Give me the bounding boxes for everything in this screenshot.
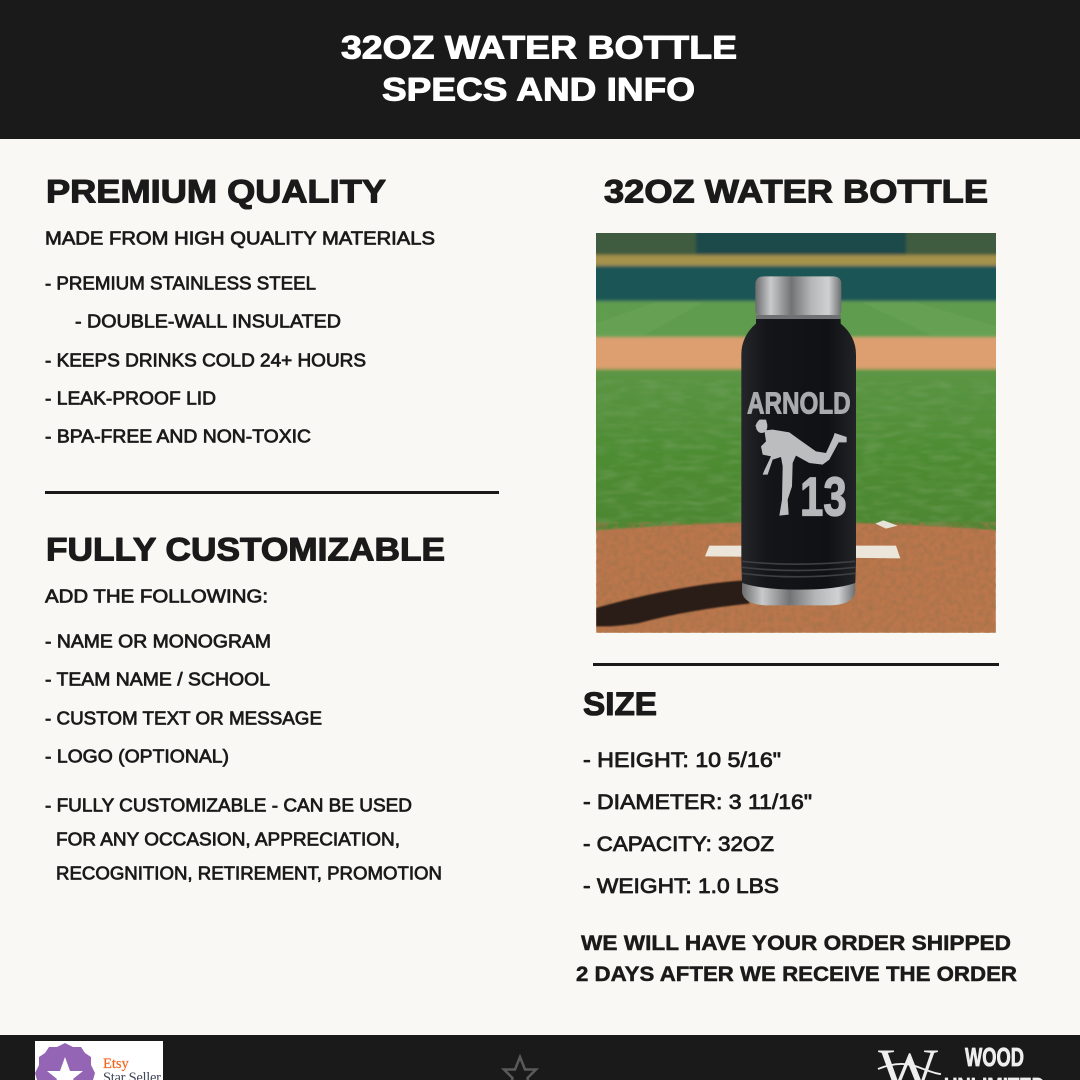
feature list: customization options: - NAME OR MONOGRAM: [45, 630, 271, 652]
badge: etsy star seller: [35, 1041, 163, 1080]
feature list: quality: - LEAK-PROOF LID: [45, 388, 216, 408]
icon: star outline: [504, 1057, 536, 1080]
badge label: Etsy: [103, 1056, 130, 1072]
header band: [0, 0, 1080, 139]
shipping callout: [576, 932, 1017, 986]
size list: - WEIGHT: 1.0 LBS: [583, 875, 779, 898]
engraved name: ARNOLD: [747, 387, 851, 421]
badge label: [103, 1056, 161, 1080]
feature list: quality: - BPA-FREE AND NON-TOXIC: [45, 426, 311, 446]
feature list: customization options: - LOGO (OPTIONAL): [45, 746, 229, 766]
logo swoosh: [878, 1064, 941, 1074]
text block: occasions: RECOGNITION, RETIREMENT, PROMOTION: [56, 862, 442, 884]
panel: size: [583, 686, 812, 898]
bottle body: [741, 318, 856, 590]
shipping callout: 2 DAYS AFTER WE RECEIVE THE ORDER: [576, 963, 1017, 986]
feature list: quality: - DOUBLE-WALL INSULATED: [75, 310, 341, 332]
size list: - CAPACITY: 32OZ: [583, 833, 774, 856]
intro text: add the following: ADD THE FOLLOWING:: [45, 586, 268, 606]
panel: premium quality: [45, 174, 435, 446]
logo wordmark: WOOD: [965, 1042, 1024, 1072]
title: SPECS AND INFO: [382, 72, 695, 108]
brand logo: wood unlimited: [878, 1037, 1045, 1080]
icon: purple badge: [35, 1043, 95, 1080]
heading: premium quality: PREMIUM QUALITY: [46, 174, 386, 210]
text block: occasions: FOR ANY OCCASION, APPRECIATION,: [56, 828, 400, 850]
product photo: engraved bottle on pitcher's mound: [586, 223, 1006, 633]
title: [341, 30, 737, 108]
logo wordmark: [944, 1042, 1045, 1080]
feature list: quality: - KEEPS DRINKS COLD 24+ HOURS: [45, 350, 366, 370]
title: 32OZ WATER BOTTLE: [341, 30, 737, 66]
bottle: [741, 276, 856, 605]
heading: size: SIZE: [583, 686, 657, 722]
text block: occasions: [45, 794, 442, 884]
engraved number: 13: [800, 465, 847, 527]
feature list: customization options: [45, 630, 322, 766]
bottle base: [742, 580, 856, 606]
heading: fully customizable: FULLY CUSTOMIZABLE: [46, 532, 445, 568]
intro text: materials: MADE FROM HIGH QUALITY MATERIALS: [45, 228, 435, 248]
heading: product name: 32OZ WATER BOTTLE: [604, 174, 988, 210]
engraved pitcher silhouette: [755, 420, 847, 516]
ballpark background: [586, 223, 1006, 633]
feature list: quality: [45, 272, 366, 446]
panel: fully customizable: [45, 532, 445, 884]
size list: - HEIGHT: 10 5/16": [583, 749, 781, 772]
text block: occasions: - FULLY CUSTOMIZABLE - CAN BE USED: [45, 794, 412, 816]
size list: - DIAMETER: 3 11/16": [583, 791, 812, 814]
bottle ridges: [742, 561, 855, 577]
bottle lid: [755, 276, 841, 315]
footer band: [0, 1035, 1080, 1080]
shipping callout: WE WILL HAVE YOUR ORDER SHIPPED: [581, 932, 1011, 955]
outfield stripes: [596, 302, 996, 336]
feature list: customization options: - TEAM NAME / SCHOOL: [45, 668, 270, 690]
size list: [583, 749, 812, 898]
feature list: quality: - PREMIUM STAINLESS STEEL: [45, 272, 316, 294]
feature list: customization options: - CUSTOM TEXT OR MESSAGE: [45, 708, 322, 728]
icon: badge star: [47, 1057, 83, 1080]
